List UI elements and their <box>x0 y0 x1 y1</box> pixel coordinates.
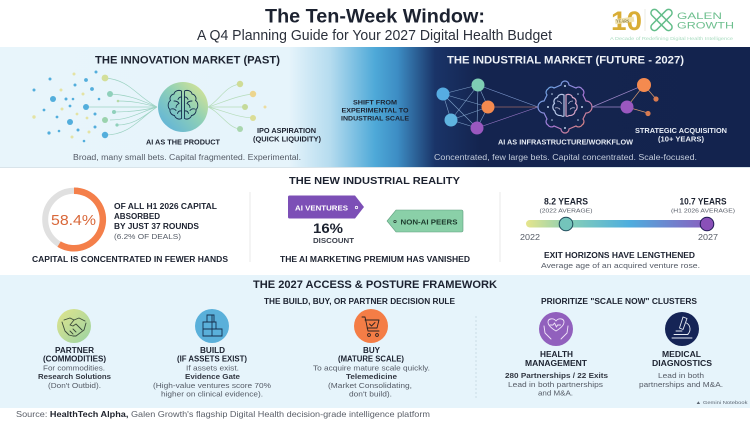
logo: Galen Growth 10 years <box>610 6 734 41</box>
chart: scattered small bets <box>32 70 157 142</box>
donut chart: 58.4%: 58.4% <box>51 213 96 229</box>
caption: AI premium vanished: THE AI MARKETING PREMIUM HAS VANISHED <box>280 255 470 264</box>
text: capital stat: ABSORBED <box>114 212 160 221</box>
chart: concentrated network <box>436 78 538 134</box>
text: partner: For commodities. <box>43 364 105 372</box>
text: partner <box>38 346 111 390</box>
logo: Galen Growth 10 years: 10 <box>611 6 642 36</box>
text: capital stat <box>114 202 217 241</box>
text: health management <box>505 349 608 398</box>
text: capital stat: BY JUST 37 ROUNDS <box>114 222 199 231</box>
chart: exit horizon timeline: 2027 <box>698 233 719 242</box>
text: medical diagnostics <box>639 349 723 389</box>
text: buy <box>313 346 430 398</box>
text: build: If assets exist. <box>186 364 239 372</box>
text: capital stat: (6.2% OF DEALS) <box>114 232 182 241</box>
label: shift from experimental to industrial scale: EXPERIMENTAL TO <box>342 108 408 114</box>
text: buy: (MATURE SCALE) <box>338 354 404 364</box>
chart: exit horizon timeline: 10.7 YEARS <box>680 196 727 206</box>
caption: innovation market: Broad, many small bets. Capital fragmented. Experimental. <box>73 153 301 162</box>
icon: heart in hands <box>539 312 573 346</box>
subtitle: A Q4 Planning Guide for Your 2027 Digital Health Budget <box>197 28 552 44</box>
logo: Galen Growth 10 years: YEARS <box>616 18 629 24</box>
chart: exit horizon timeline: 2022 <box>520 233 541 242</box>
text: health management: MANAGEMENT <box>525 358 587 368</box>
label: AI as the product: AI AS THE PRODUCT <box>146 138 220 146</box>
text: partner: PARTNER <box>55 346 94 355</box>
chart: acquisition nodes <box>592 78 659 116</box>
text: buy: Telemedicine <box>346 372 397 381</box>
text: build: (IF ASSETS EXIST) <box>177 354 247 364</box>
caption: exit horizons <box>541 251 700 270</box>
title: The Ten-Week Window: <box>265 6 485 28</box>
heading: innovation market: THE INNOVATION MARKET (PAST) <box>95 54 280 66</box>
stat: 16% discount: DISCOUNT <box>313 238 355 245</box>
text: build: BUILD <box>200 346 225 355</box>
heading: framework: THE 2027 ACCESS & POSTURE FRAMEWORK <box>253 279 497 291</box>
text: buy: don't build). <box>349 390 392 398</box>
label: strategic acquisition <box>635 126 727 144</box>
text: buy: To acquire mature scale quickly. <box>313 364 430 372</box>
label: strategic acquisition: STRATEGIC ACQUISITION <box>635 126 727 135</box>
label: shift from experimental to industrial scale: INDUSTRIAL SCALE <box>341 116 409 122</box>
text: partner: Research Solutions <box>38 372 111 381</box>
stat: 16% discount <box>313 221 355 245</box>
caption: capital concentrated: CAPITAL IS CONCENTRATED IN FEWER HANDS <box>32 255 229 264</box>
text: health management: 280 Partnerships / 22 Exits <box>505 371 608 380</box>
tag: non-AI peers: NON-AI PEERS <box>400 218 458 226</box>
label: shift from experimental to industrial scale: SHIFT FROM <box>353 100 397 106</box>
text: build: Evidence Gate <box>185 372 240 381</box>
logo: Galen Growth 10 years: A Decade of Redefining Digital Health Intelligence <box>610 36 734 41</box>
caption: exit horizons: EXIT HORIZONS HAVE LENGTHENED <box>544 251 695 260</box>
icon: microscope <box>665 312 699 346</box>
chart: exit horizon timeline <box>520 196 735 242</box>
text: build <box>153 346 272 398</box>
label: IPO aspiration <box>253 126 321 144</box>
text: health management: and M&A. <box>538 388 573 398</box>
text: buy: BUY <box>363 346 381 355</box>
source line: Source: HealthTech Alpha, Galen Growth's flagship Digital Health decision-grade intelligence platform <box>16 409 430 419</box>
panel: the new industrial reality <box>32 175 735 270</box>
text: medical diagnostics: partnerships and M&A. <box>639 380 723 389</box>
icon: shopping cart <box>354 309 388 343</box>
caption: industrial market: Concentrated, few large bets. Capital concentrated. Scale-focused. <box>434 153 697 162</box>
tag: AI ventures: AI VENTURES <box>295 204 348 212</box>
text: partner: (Don't Outbid). <box>48 381 101 390</box>
panel: market shift banner <box>0 47 750 168</box>
label: IPO aspiration: (QUICK LIQUIDITY) <box>253 134 321 144</box>
text: build: higher on clinical evidence). <box>161 390 263 398</box>
label: strategic acquisition: (10+ YEARS) <box>658 134 704 144</box>
label: shift from experimental to industrial scale <box>341 100 409 122</box>
subheading: decision rule: THE BUILD, BUY, OR PARTNER DECISION RULE <box>264 297 455 306</box>
tag: non-AI peers <box>387 210 463 232</box>
subheading: clusters: PRIORITIZE "SCALE NOW" CLUSTERS <box>541 297 697 306</box>
icon: gear brain <box>538 81 592 133</box>
heading: industrial market: THE INDUSTRIAL MARKET (FUTURE - 2027) <box>447 54 684 66</box>
title <box>197 6 552 44</box>
icon: handshake <box>57 309 91 343</box>
stat: 16% discount: 16% <box>313 221 343 236</box>
logo: Galen Growth 10 years: GALEN <box>677 11 722 22</box>
text: medical diagnostics: DIAGNOSTICS <box>652 358 712 368</box>
donut chart: 58.4% <box>45 191 103 248</box>
text: build: (High-value ventures score 70% <box>153 381 272 390</box>
text: capital stat: OF ALL H1 2026 CAPITAL <box>114 202 217 211</box>
heading: new industrial reality: THE NEW INDUSTRIAL REALITY <box>289 175 460 187</box>
chart: exit horizon timeline: (H1 2026 AVERAGE) <box>671 208 735 214</box>
text: health management: HEALTH <box>540 349 573 359</box>
label: IPO aspiration: IPO ASPIRATION <box>257 126 316 135</box>
caption: exit horizons: Average age of an acquired venture rose. <box>541 261 700 270</box>
text: buy: (Market Consolidating, <box>328 381 412 390</box>
text: partner: (COMMODITIES) <box>43 354 106 364</box>
icon: building blocks <box>195 309 229 343</box>
text: medical diagnostics: MEDICAL <box>662 349 701 359</box>
text: health management: Lead in both partnerships <box>508 380 603 389</box>
chart: IPO exit branches <box>208 81 266 132</box>
text: medical diagnostics: Lead in both <box>658 371 704 380</box>
label: AI as infrastructure: AI AS INFRASTRUCTURE/WORKFLOW <box>498 138 634 146</box>
panel: access and posture framework <box>0 275 750 408</box>
badge: Gemini Notebook: ▲ Gemini Notebook <box>696 400 748 406</box>
icon: brain orb <box>158 82 208 132</box>
chart: exit horizon timeline: 8.2 YEARS <box>544 196 588 206</box>
tag: AI ventures <box>288 196 364 218</box>
chart: exit horizon timeline: (2022 AVERAGE) <box>540 208 593 214</box>
logo: Galen Growth 10 years: GROWTH <box>677 20 734 32</box>
